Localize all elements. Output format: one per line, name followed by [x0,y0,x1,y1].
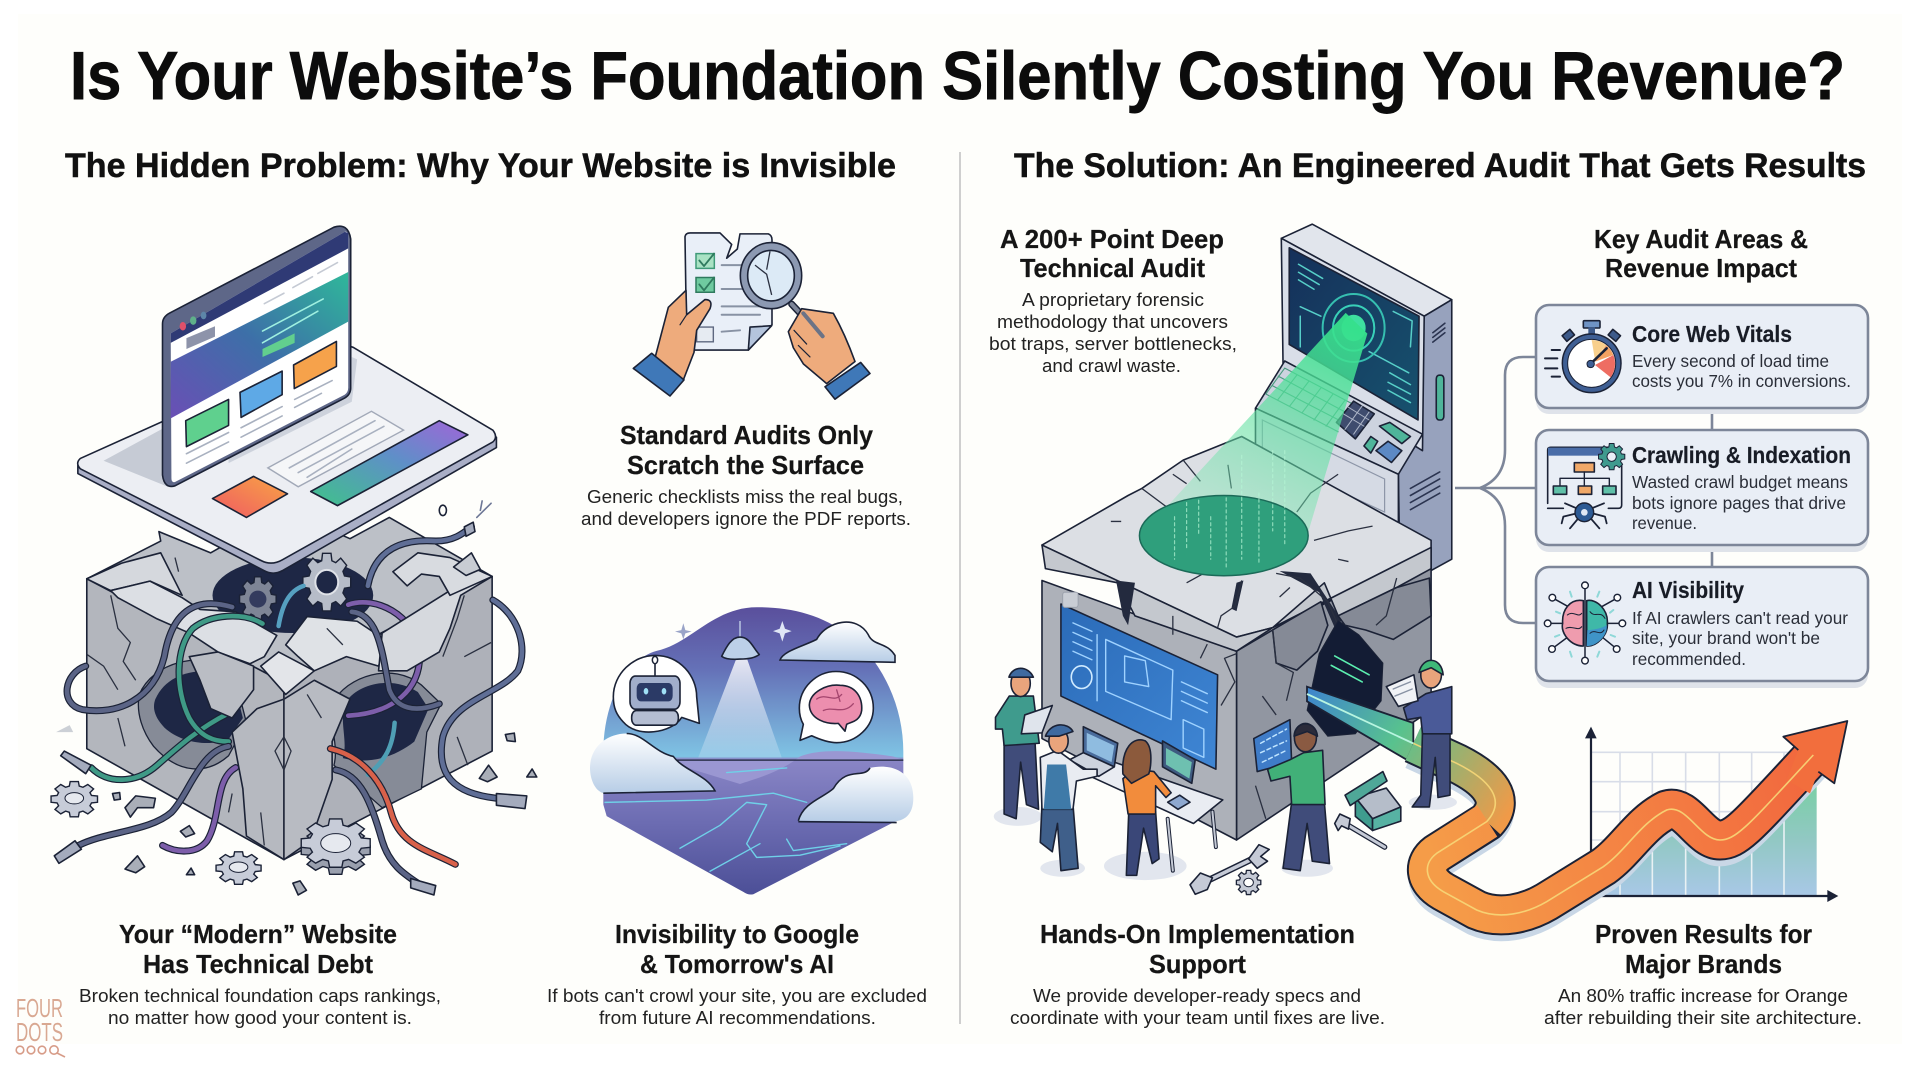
text block: standard audits [581,420,911,529]
arrowhead [1783,721,1847,793]
text block: invisibility [547,919,927,1028]
logo: Four Dots: DOTS [16,1017,63,1047]
sparkles [675,623,692,639]
heading: hidden problem: The Hidden Problem: Why Your Website is Invisible [65,147,896,185]
floating slab top [78,344,496,563]
card: Crawling and Indexation: Wasted crawl budget means [1632,472,1848,492]
text block: 200 point audit: A proprietary forensic [1022,289,1204,310]
right concrete face [284,576,492,860]
torn checklist [685,233,772,350]
card: Core Web Vitals: costs you 7% in conversions. [1632,371,1851,391]
engineer in overalls [1040,725,1097,871]
slab widgets [212,411,468,517]
illustration: AI invisibility landscape [590,607,913,895]
heading: key audit areas: Revenue Impact [1605,253,1797,283]
text block: invisibility: from future AI recommendations. [599,1007,876,1028]
right breach [343,683,429,761]
floor debris gears [51,782,370,884]
data streams [1175,451,1285,569]
text block: modern website: Broken technical foundation caps rankings, [79,985,441,1006]
centre divider [959,152,961,1024]
dark cavity [212,558,373,633]
text block: hands-on implementation: Hands-On Implementation [1040,919,1355,949]
growth chart [1585,727,1838,902]
text block: standard audits: Scratch the Surface [627,450,864,480]
text block: standard audits: Standard Audits Only [620,420,874,450]
text block: hands-on implementation: We provide developer-ready specs and [1033,985,1361,1006]
foundation block left face [1042,580,1237,840]
text block: invisibility: If bots can't crowl your site, you are excluded [547,985,927,1006]
text block: proven results: Proven Results for [1595,919,1812,949]
text block: 200 point audit: and crawl waste. [1042,355,1181,376]
text block: hands-on implementation [1010,919,1385,1028]
road shadow [1413,751,1813,922]
engineer at holo panel [1254,720,1330,871]
icon: stopwatch [1545,321,1621,393]
scan ellipse [1139,495,1308,576]
card: AI Visibility: recommended. [1632,649,1746,669]
cable connectors [54,522,527,895]
scanner dome [722,621,759,659]
pipe light stripe [1307,694,1417,745]
card text: Core Web Vitals [1632,321,1792,347]
chart area [1592,775,1817,895]
left concrete face [87,579,284,860]
text block: proven results: Major Brands [1625,949,1782,979]
icon: hands inspecting audit checklist [633,233,870,399]
cracks [1111,460,1397,819]
text block: proven results [1544,919,1862,1028]
key audit brackets [1455,357,1712,623]
gears inside cavity [240,553,351,621]
left hand [633,290,711,396]
toolbox [1345,772,1401,831]
text block: modern website: no matter how good your content is. [108,1007,412,1028]
tapered data pipe [1307,687,1413,764]
right face chunks [1273,578,1431,670]
chart axes [1591,735,1830,896]
text block: standard audits: and developers ignore the PDF reports. [581,508,911,529]
wrenches [1190,814,1385,895]
text block: modern website: Your “Modern” Website [119,919,397,949]
block top rim [1042,545,1431,651]
floating slab thickness [78,437,496,573]
icon: split brain network [1544,582,1626,664]
road end gradient [1427,755,1813,915]
desk [1070,727,1223,871]
brain speech bubble [799,671,873,743]
illustration: scanner and engineered foundation [1042,224,1452,840]
road to results arrow [1307,687,1847,922]
robot speech bubble [613,655,699,732]
text block: 200 point audit: methodology that uncovers [997,311,1228,332]
card: AI Visibility: If AI crawlers can't read your [1632,608,1848,628]
text block: proven results: An 80% traffic increase for Orange [1558,985,1848,1006]
right hand [788,309,870,399]
road outline [1413,743,1813,915]
left breach rim [138,660,246,769]
chart grid [1592,752,1800,895]
browser screen [162,226,351,486]
card: AI Visibility: site, your brand won't be [1632,628,1820,648]
text block: 200 point audit: A 200+ Point Deep [1000,224,1224,254]
blueprint screen [1061,592,1218,769]
card: Crawling and Indexation: bots ignore pages that drive [1632,493,1846,513]
breach in block [1307,621,1383,736]
glowing data in breach [1331,656,1369,682]
text block: 200 point audit [989,224,1237,376]
text block: hands-on implementation: coordinate with your team until fixes are live. [1010,1007,1385,1028]
broken top fragments [87,553,492,860]
engineer with tablet [995,668,1052,819]
scan beam [1140,313,1367,536]
card text: AI Visibility [1632,577,1744,603]
card: Core Web Vitals: Every second of load time [1632,351,1829,371]
sky and ground shield [603,607,903,895]
card: AI Visibility [1536,567,1868,688]
engineer with report [1386,660,1452,807]
slab shadow [104,428,168,487]
floor shadows [994,795,1457,880]
left breach [154,671,243,743]
text block: proven results: after rebuilding their site architecture. [1544,1007,1862,1028]
clouds [590,622,913,823]
card: Crawling and Indexation [1536,430,1868,552]
text block: invisibility: & Tomorrow's AI [640,949,834,979]
icon: site tree and spider [1548,444,1625,528]
logo: Four Dots: FOUR [16,993,63,1023]
card text: Crawling & Indexation [1632,442,1851,468]
engineer in orange [1123,740,1171,875]
engineers and tools [994,660,1457,895]
illustration: laptop on crumbling foundation [51,226,537,895]
front cables [67,527,522,883]
heading: the solution: The Solution: An Engineered Audit That Gets Results [1014,147,1866,185]
dark crack wedges [1116,571,1342,628]
text block: invisibility: Invisibility to Google [615,919,859,949]
road start gradient [1413,743,1495,822]
text block: standard audits: Generic checklists miss the real bugs, [587,486,903,507]
card: Core Web Vitals [1536,305,1868,414]
text block: hands-on implementation: Support [1149,949,1246,979]
text block: modern website [79,919,441,1028]
scanner machine [1255,224,1452,672]
text block: 200 point audit: Technical Audit [1020,253,1205,283]
text block: 200 point audit: bot traps, server bottlenecks, [989,333,1237,354]
text block: modern website: Has Technical Debt [143,949,373,979]
light beam [698,658,782,757]
logo: Four Dots [16,993,65,1057]
rubble chips [56,501,537,895]
card: Crawling and Indexation: revenue. [1632,513,1697,533]
heading: key audit areas [1594,224,1808,283]
right breach rim [331,673,441,808]
foundation block top [1042,437,1431,637]
concrete block back top [87,510,492,683]
heading: key audit areas: Key Audit Areas & [1594,224,1808,254]
horizon and hills [607,751,903,784]
cracks [87,558,491,860]
cables behind rubble [91,586,420,780]
foundation block right face [1237,550,1431,840]
magnifying glass [740,243,822,336]
road centre stripe [1413,743,1813,915]
circuit streams [605,768,847,871]
